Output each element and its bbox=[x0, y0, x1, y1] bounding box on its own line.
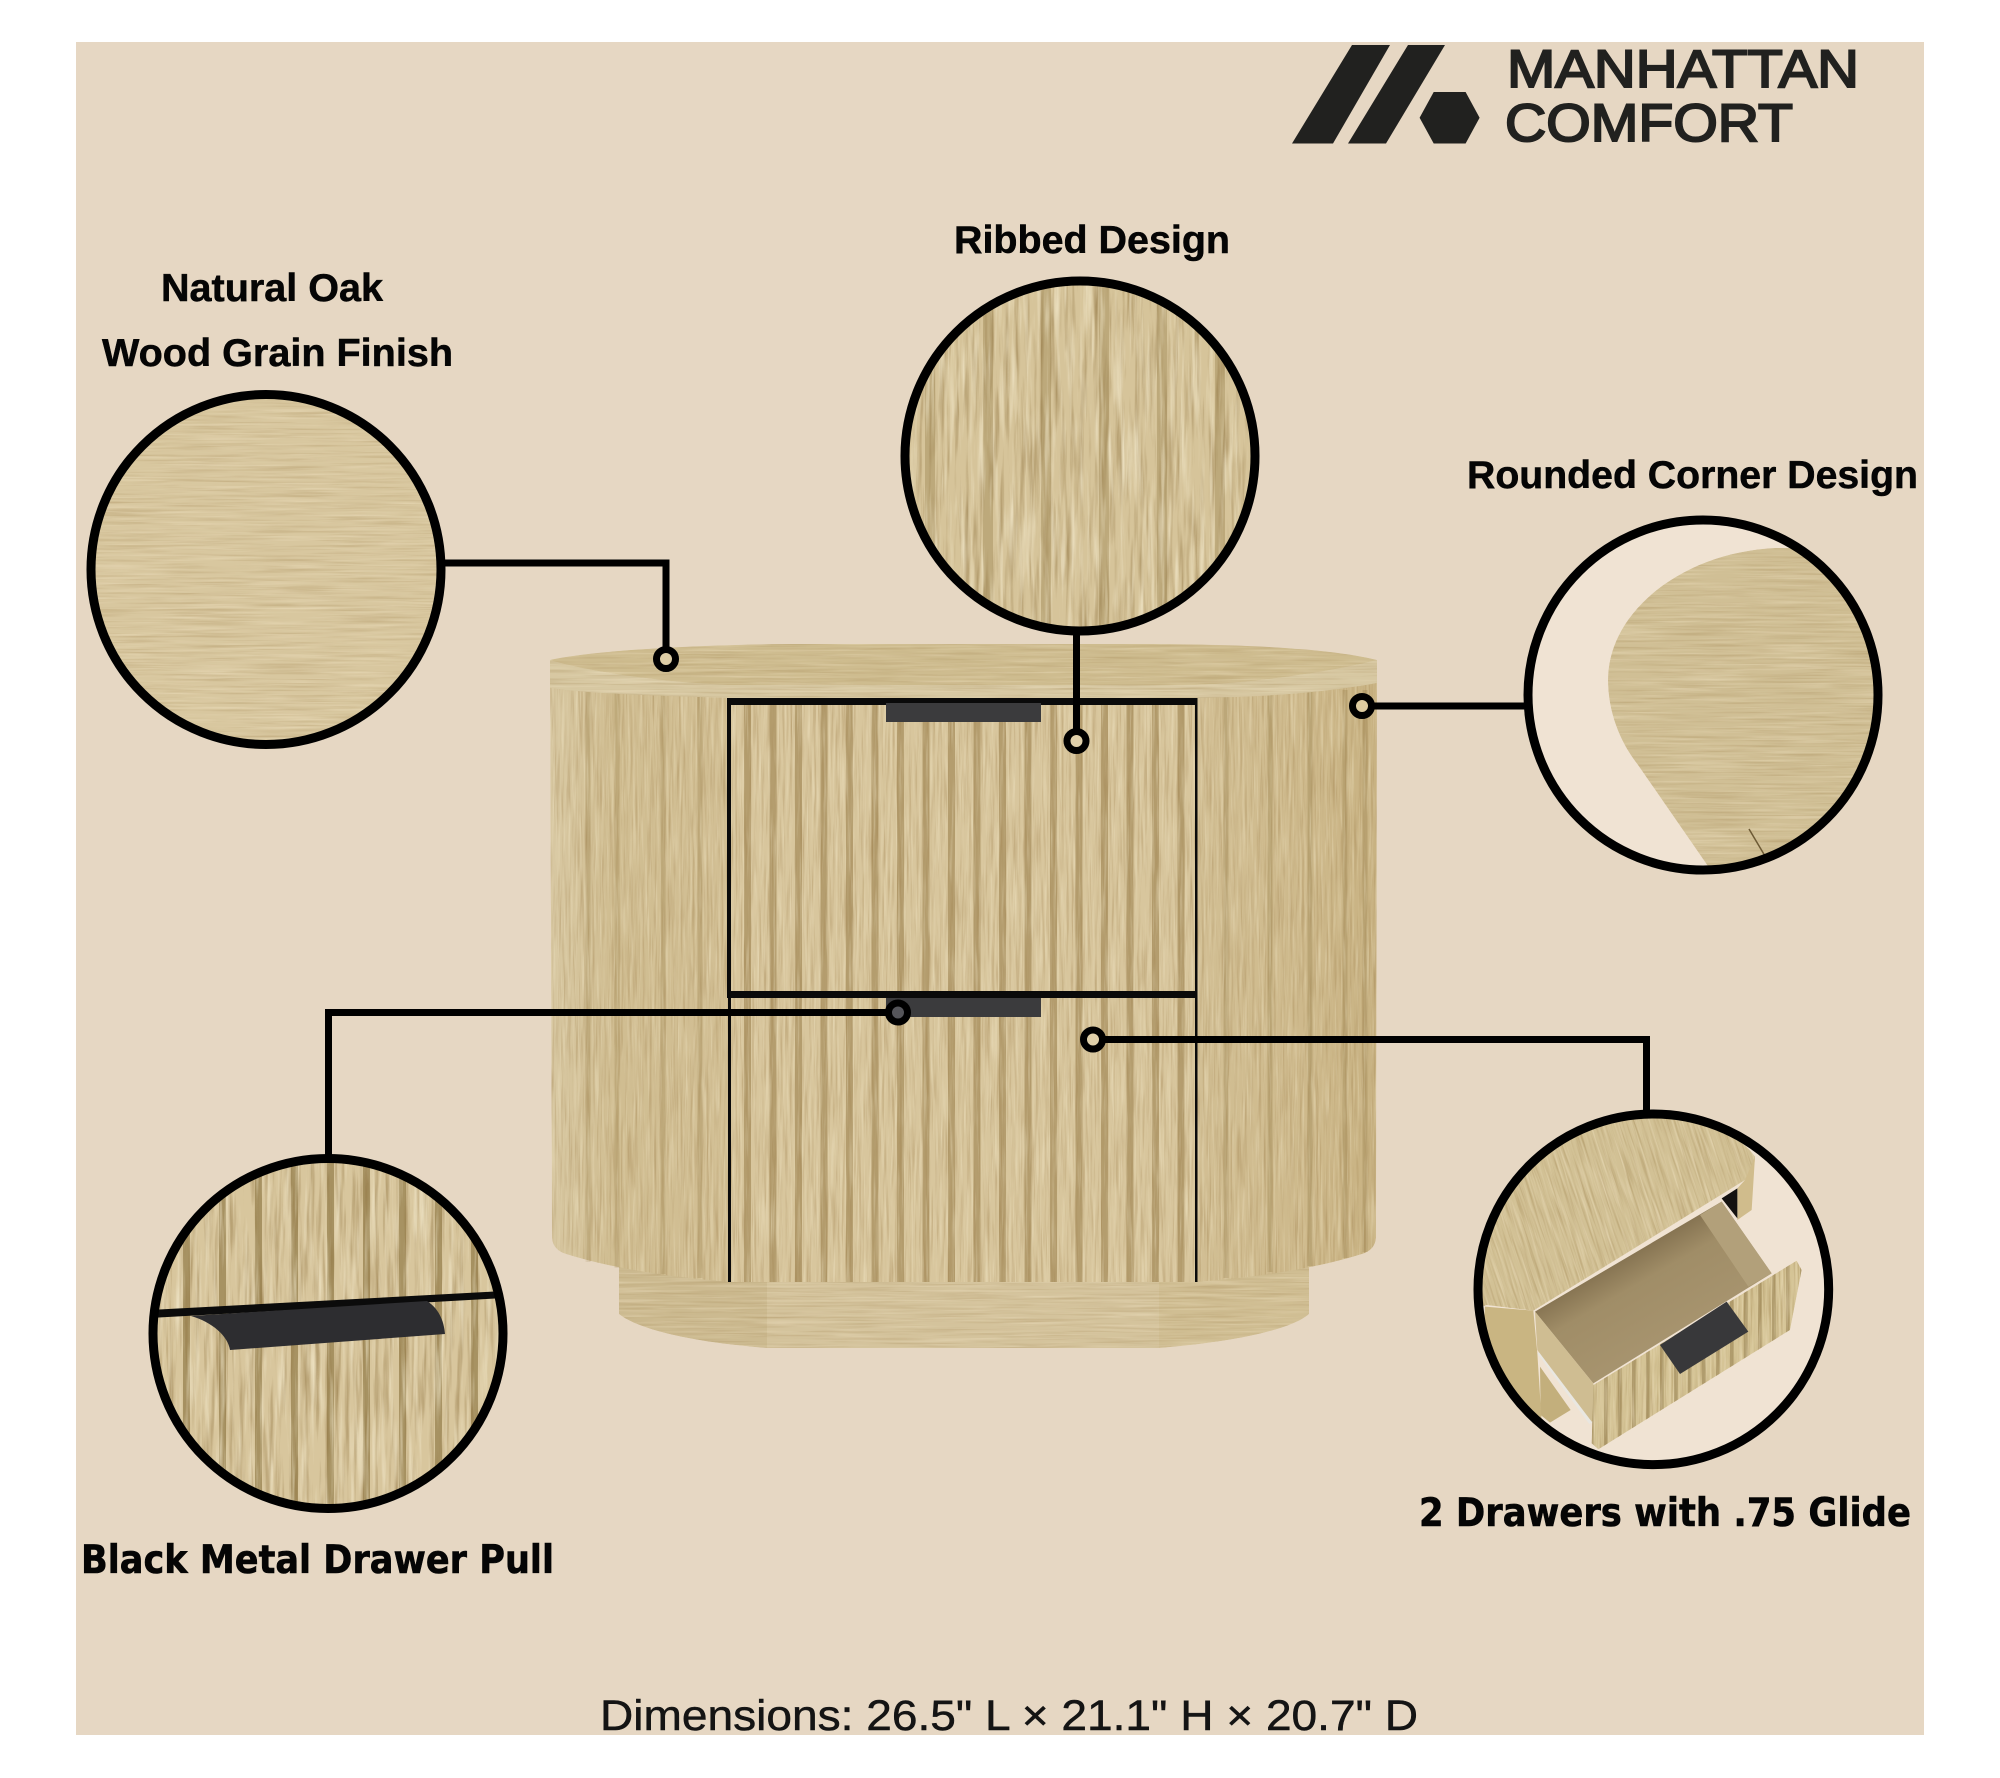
label: rounded corner design: Rounded Corner Design bbox=[1467, 454, 1918, 497]
cabinet top bbox=[1482, 1118, 1755, 1310]
label: 2 drawers with glide: 2 Drawers with .75 Glide bbox=[1419, 1491, 1911, 1536]
drawer outlines bbox=[727, 698, 1198, 1282]
detail circle: black metal drawer pull bbox=[148, 1153, 508, 1515]
detail circle: open drawer bbox=[1474, 1110, 1834, 1470]
connector: ribbed design bbox=[1073, 632, 1080, 730]
label: wood grain finish: Wood Grain Finish bbox=[102, 332, 453, 375]
detail circle: natural oak finish bbox=[87, 390, 445, 750]
drawer pull: upper bbox=[886, 703, 1041, 722]
label: black metal drawer pull: Black Metal Drawer Pull bbox=[81, 1538, 554, 1583]
labels bbox=[81, 219, 1918, 1740]
right rounded side bbox=[1196, 680, 1377, 1282]
label: natural oak: Natural Oak bbox=[161, 267, 383, 310]
drawer interior bbox=[1535, 1202, 1772, 1383]
drawer gap line bbox=[150, 1291, 505, 1318]
nightstand illustration bbox=[550, 644, 1377, 1348]
pull handle bbox=[191, 1301, 445, 1350]
callout markers bbox=[656, 650, 1372, 1049]
marker: ribbed front bbox=[1067, 732, 1086, 750]
connector: rounded corner bbox=[1373, 702, 1526, 710]
logo mark bbox=[1292, 45, 1480, 144]
cabinet left leg bbox=[1483, 1307, 1542, 1422]
label: ribbed design: Ribbed Design bbox=[954, 219, 1230, 262]
detail circle: ribbed design bbox=[900, 276, 1260, 636]
drawer pull: lower bbox=[886, 998, 1041, 1017]
plinth base bbox=[619, 1250, 1309, 1348]
logo wordmark: MANHATTAN bbox=[1507, 40, 1859, 99]
logo wordmark: COMFORT bbox=[1505, 94, 1793, 153]
oval top bbox=[550, 644, 1377, 698]
marker: side bbox=[1352, 696, 1372, 716]
marker: top bbox=[656, 650, 676, 668]
drawer glide bbox=[1537, 1352, 1593, 1424]
callout connectors bbox=[328, 563, 1646, 1156]
drawer front bbox=[1592, 1261, 1802, 1449]
connector: drawer pull bbox=[328, 1012, 886, 1156]
logo wordmark bbox=[1505, 40, 1859, 153]
drawer handle bbox=[1660, 1302, 1748, 1374]
left rounded side bbox=[550, 680, 730, 1282]
ribbed drawer fronts bbox=[728, 697, 1196, 1282]
marker: pull bbox=[888, 1003, 908, 1022]
corner crack bbox=[1749, 829, 1765, 856]
cabinet side bbox=[1737, 1157, 1755, 1220]
logo: Manhattan Comfort bbox=[1292, 40, 1859, 153]
connector: wood grain finish bbox=[445, 563, 666, 648]
marker: drawer bbox=[1084, 1030, 1102, 1049]
lower drawer bbox=[1540, 1367, 1571, 1423]
drawer side bbox=[1535, 1312, 1597, 1422]
detail circle: rounded corner bbox=[1522, 515, 1890, 877]
dimensions: Dimensions: 26.5" L × 21.1" H × 20.7" D bbox=[600, 1692, 1418, 1740]
connector: drawers bbox=[1104, 1040, 1646, 1112]
